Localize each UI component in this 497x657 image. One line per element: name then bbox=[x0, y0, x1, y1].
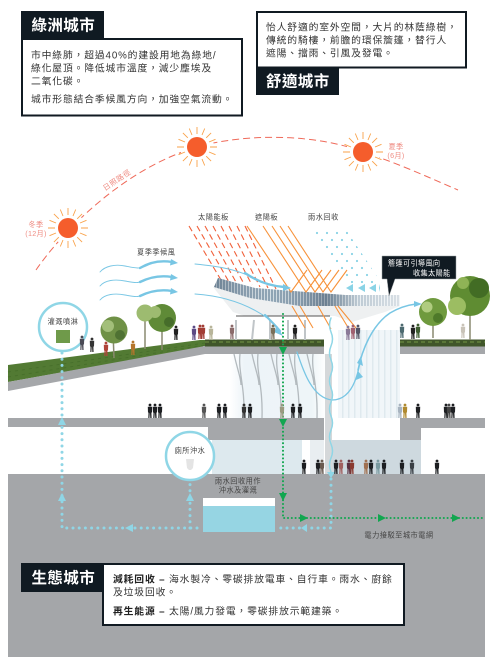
label: sun path: 日照路徑 bbox=[101, 167, 133, 193]
trees bbox=[100, 276, 490, 358]
middle floor slabs bbox=[8, 418, 485, 440]
people bbox=[80, 324, 465, 474]
heading: oasis city bbox=[21, 11, 104, 39]
heading: eco city bbox=[21, 563, 103, 592]
panel: oasis city text bbox=[22, 39, 242, 116]
circle: toilet flushing bbox=[166, 432, 214, 480]
label: sun shade: 遮陽板 bbox=[255, 212, 278, 222]
callout: canopy bbox=[382, 256, 456, 296]
label: rainwater reuse: 雨水回收用作 bbox=[215, 476, 261, 486]
heading: comfort city: 舒適城市 bbox=[266, 72, 330, 90]
panel: eco city text: 再生能源 – 太陽/風力發電，零碳排放示範建築。 bbox=[113, 604, 343, 618]
glass facades bbox=[212, 330, 421, 474]
callout: canopy: 收集太陽能 bbox=[413, 268, 450, 278]
label: summer: 夏季 bbox=[389, 142, 403, 151]
heading: oasis city: 綠洲城市 bbox=[32, 16, 95, 34]
circle: toilet flushing: 廁所沖水 bbox=[175, 446, 205, 455]
label: summer: (6月) bbox=[387, 151, 405, 160]
sun path arc bbox=[36, 137, 458, 270]
label: power grid: 電力接駁至城市電網 bbox=[364, 530, 434, 540]
label: winter: 冬季 bbox=[29, 220, 43, 229]
label: summer bbox=[387, 142, 405, 160]
diagram: rain dots bbox=[309, 228, 382, 292]
panel: comfort city text: 傳統的騎樓，前膽的環保簷篷，替行人 bbox=[266, 34, 447, 46]
water line bbox=[327, 318, 335, 478]
green ramp bbox=[8, 340, 250, 391]
wind arrows bbox=[100, 259, 422, 400]
callout: canopy: 簷篷可引導風向 bbox=[388, 258, 440, 268]
green dotted power lines bbox=[283, 314, 482, 518]
panel: oasis city text: 市中綠肺，超過40%的建設用地為綠地/ bbox=[31, 48, 216, 62]
panel: comfort city text bbox=[257, 12, 466, 68]
icon: midday sun bbox=[177, 127, 217, 167]
label: winter: (12月) bbox=[25, 229, 47, 238]
heading: comfort city bbox=[256, 68, 339, 95]
ground section bbox=[8, 474, 485, 657]
rainwater tank bbox=[203, 498, 275, 532]
panel: eco city text bbox=[103, 564, 404, 625]
label: summer monsoon: 夏季季候風 bbox=[137, 248, 175, 256]
green direction arrows bbox=[279, 347, 460, 522]
upper slabs bbox=[203, 340, 485, 354]
circle: irrigation bbox=[39, 303, 87, 351]
diagram: solar rays bbox=[189, 226, 276, 289]
panel: eco city text: 減耗回收 – 海水製冷、零碳排放電車、自行車。雨水、廚餘 bbox=[113, 572, 393, 586]
blue dotted recycling lines bbox=[62, 353, 331, 528]
label: rainwater reuse: 沖水及灌溉 bbox=[219, 486, 257, 494]
label: solar panels: 太陽能板 bbox=[198, 212, 229, 222]
panel: oasis city text: 二氧化碳。 bbox=[31, 74, 84, 88]
building roof bbox=[213, 278, 400, 340]
icon: summer sun bbox=[343, 132, 383, 172]
panel: comfort city text: 遮陽、擋雨、引風及發電。 bbox=[266, 46, 394, 60]
label: rainwater reuse bbox=[215, 476, 261, 494]
label: winter bbox=[25, 220, 47, 238]
icon: winter sun bbox=[48, 208, 88, 248]
panel: oasis city text: 城市形態結合季候風方向，加強空氣流動。 bbox=[31, 92, 233, 106]
heading: eco city: 生態城市 bbox=[32, 568, 95, 587]
diagram: shade reflected rays bbox=[247, 226, 356, 329]
panel: comfort city text: 怡人舒適的室外空間，大片的林蔭綠樹， bbox=[266, 20, 458, 34]
label: rain collection: 雨水回收 bbox=[308, 212, 339, 222]
panel: eco city text: 及垃圾回收。 bbox=[113, 586, 177, 598]
circle: irrigation: 灌溉噴淋 bbox=[48, 317, 78, 326]
blue direction arrows bbox=[58, 417, 307, 532]
panel: oasis city text: 綠化屋頂。降低城市溫度，減少塵埃及 bbox=[31, 62, 212, 74]
